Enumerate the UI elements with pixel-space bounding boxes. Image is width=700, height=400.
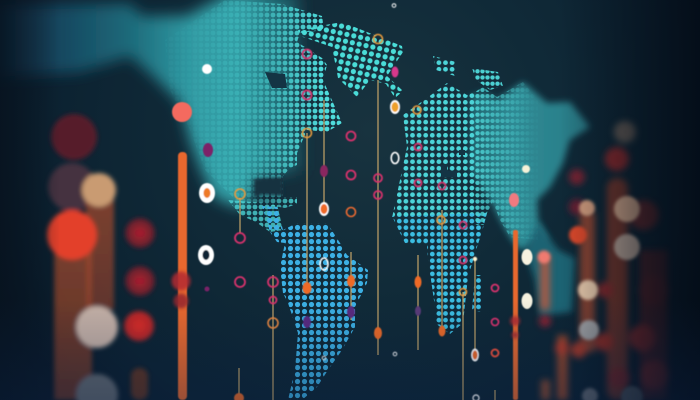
map: North America dots [196, 0, 342, 208]
map: Central America dots [228, 200, 282, 232]
bokeh: right bars and circles [539, 121, 669, 400]
orange ring markers [235, 34, 498, 356]
coral glowing markers [172, 102, 519, 207]
thin vertical marker lines [239, 80, 495, 400]
map: blurred teal Asia underlay [470, 82, 590, 250]
map: eastern Eurasia fading dots [475, 82, 533, 239]
red bokeh markers on orange bars [172, 272, 520, 338]
filled purple and magenta markers [203, 66, 421, 328]
filled orange markers [234, 275, 446, 400]
map: South America dots [262, 204, 375, 400]
map: Africa dots [392, 213, 487, 334]
map: small lakes cut-outs [441, 150, 465, 177]
map: Madagascar dots [472, 275, 481, 312]
map: blurred teal North America haze [0, 0, 302, 208]
map: Greenland and Arctic dots [298, 23, 403, 97]
white markers [198, 4, 532, 400]
map: western Eurasia dots [392, 83, 474, 217]
orange bars [178, 152, 518, 400]
map: blurred South-East Asia underlay [525, 222, 575, 316]
map: Gulf cut-out [254, 177, 283, 198]
map: Hudson Bay cut-out [265, 72, 287, 88]
pink ring markers [235, 50, 498, 326]
bokeh: right highlights [538, 196, 643, 400]
map: northern islands [433, 56, 503, 90]
bokeh: left bars and circles [47, 114, 155, 400]
